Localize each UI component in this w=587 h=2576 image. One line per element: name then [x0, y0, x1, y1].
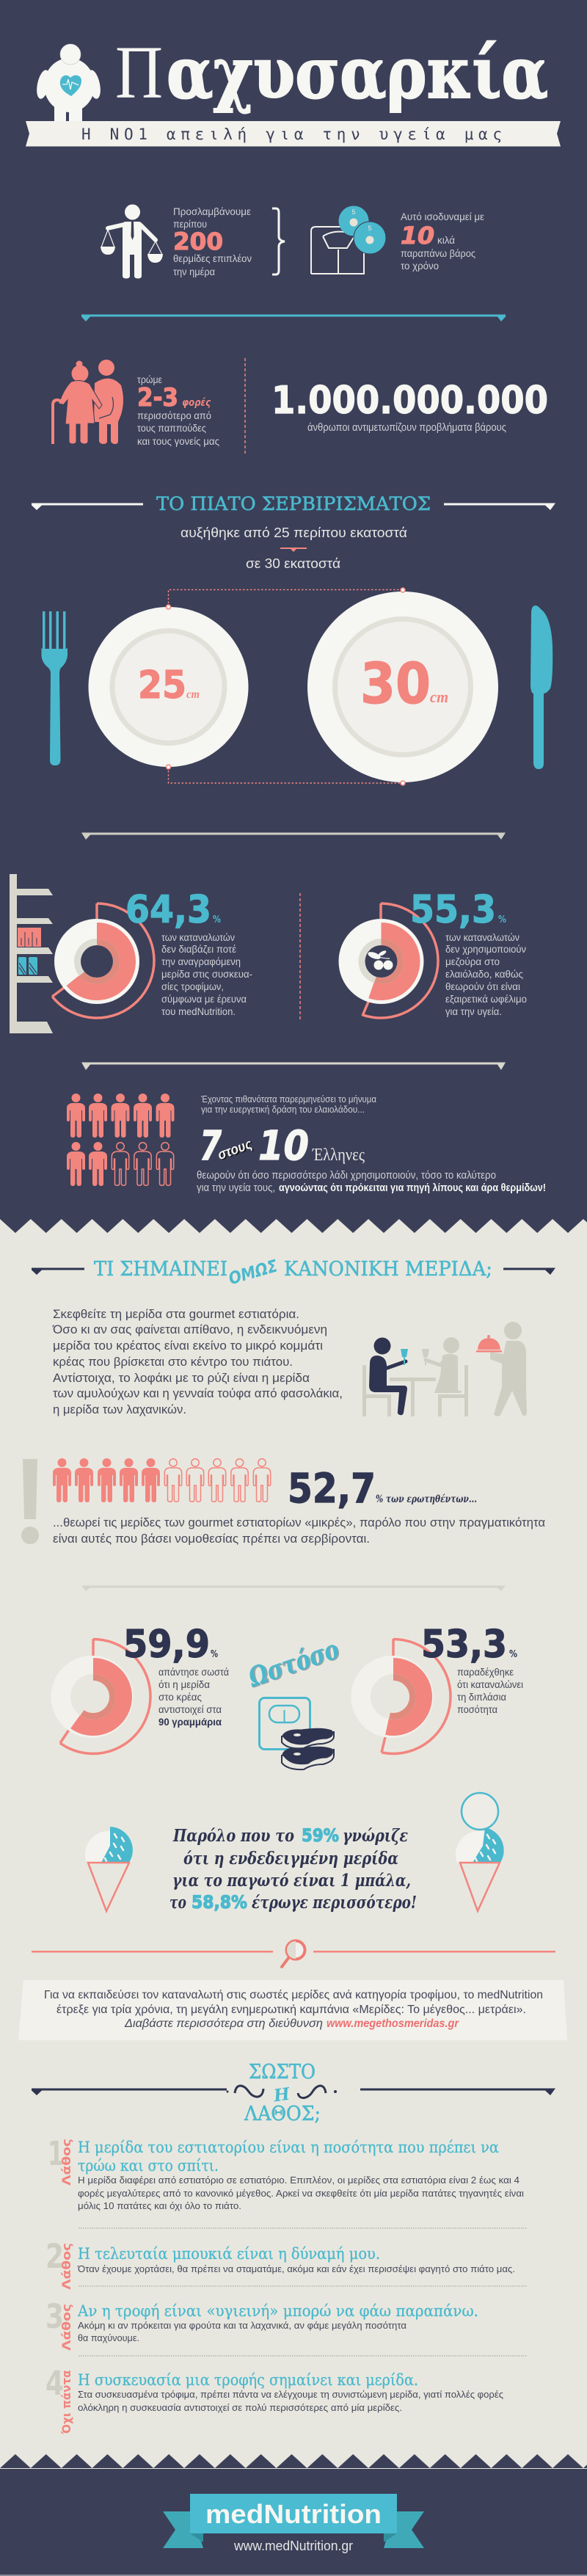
text block: ice cream statistic: για το παγωτό είναι 1 μπάλα,: [172, 1871, 411, 1891]
icon: shirt with weight discs: [311, 205, 386, 274]
statistic: 64,3 percent: %: [213, 914, 221, 925]
text: 7 in 10 Greeks: για την υγεία τους,: [197, 1182, 275, 1194]
myth 3: [45, 2297, 478, 2351]
statistic: 55,3 percent: εξαιρετικά ωφέλιμο: [445, 993, 527, 1005]
label: however: Ωστόσο: [244, 1634, 343, 1693]
text: 2-3 times: [137, 374, 219, 447]
myth 1: Η μερίδα του εστιατορίου είναι η ποσότητα που πρέπει να: [78, 2139, 499, 2156]
myth 2: [45, 2237, 515, 2290]
callout ribbon: campaign: έτρεξε για τρία χρόνια, τη μεγάλη ενημερωτική καμπάνια «Μερίδες: Το μέγεθος... μετράει».: [56, 2004, 526, 2016]
icon: fork: [41, 611, 68, 765]
statistic: 64,3 percent: του medNutrition.: [161, 1005, 236, 1017]
statistic: 55,3 percent: δεν χρησιμοποιούν: [445, 943, 526, 955]
icon: plate and double steak: [260, 1698, 334, 1769]
zigzag edge top: [0, 1219, 587, 1233]
statistic: 59,9 percent: 59,9: [123, 1623, 210, 1667]
plate: 25 cm: 25: [138, 663, 186, 707]
heading: right or wrong: ΣΩΣΤΟ: [249, 2061, 316, 2084]
text block: gourmet portion: Αντίστοιχα, το λοφάκι με το ρύζι είναι η μερίδα: [53, 1371, 310, 1385]
icon: ice cream one scoop: [85, 1827, 133, 1911]
icon: magnifier divider: [32, 1940, 555, 1967]
icon: restaurant scene: [362, 1322, 527, 1416]
callout ribbon: campaign: Για να εκπαιδεύσει τον καταναλωτή στις σωστές μερίδες ανά κατηγορία τροφίμου, το medNutrition: [44, 1989, 543, 2001]
chart: donut 55,3 percent with olive icon: [324, 903, 438, 1018]
statistic: 59,9 percent: %: [211, 1649, 218, 1660]
pictogram: 5 of 10 people: [53, 1458, 271, 1502]
divider: [81, 314, 506, 321]
statistic: one billion: 1.000.000.000: [271, 379, 548, 423]
plate size connectors: [166, 588, 405, 785]
divider: [81, 832, 506, 840]
text: 200 calories: 200: [173, 228, 223, 255]
statistic: 55,3 percent: %: [498, 914, 506, 925]
icon: man holding scales: [101, 204, 163, 279]
text: 2-3 times: τους παππούδες: [137, 422, 206, 434]
myth 1: μόλις 10 πατάτες και όχι όλο το πιάτο.: [78, 2200, 241, 2211]
myth 4: ολόκληρη η συσκευασία αντιστοιχεί σε πολύ περισσότερες από μία μερίδες.: [78, 2402, 402, 2413]
statistic: 53,3 percent: %: [509, 1649, 517, 1660]
text: 2-3 times: φορές: [182, 397, 211, 409]
icon: supermarket shelf: [10, 874, 53, 1033]
heading: right or wrong: ΛΑΘΟΣ;: [244, 2103, 321, 2125]
statistic: 52,7 percent: [288, 1465, 477, 1512]
myth 3: 3: [45, 2297, 64, 2336]
myth 1: τρώω και στο σπίτι.: [78, 2157, 219, 2175]
statistic: 64,3 percent: μερίδα στις συσκευα-: [161, 968, 252, 980]
text: 7 in 10 Greeks: Έλληνες: [312, 1146, 365, 1165]
footer logo ribbon: medNutrition: [205, 2499, 382, 2529]
background: cream panel: [0, 1219, 587, 2469]
text block: ice cream statistic: [169, 1825, 417, 1913]
text: 2-3 times: περισσότερο από: [137, 410, 211, 421]
text block: small portions: [53, 1516, 545, 1546]
icon: elderly couple: [53, 360, 123, 444]
text block: ice cream statistic: γνώριζε: [343, 1826, 408, 1846]
statistic: 53,3 percent: τη διπλάσια: [457, 1691, 506, 1703]
text: 200 calories: Προσλαμβάνουμε: [173, 205, 251, 217]
text block: gourmet portion: Όσο κι αν σας φαίνεται απίθανο, η ενδεικνυόμενη: [52, 1322, 327, 1336]
text: 7 in 10 Greeks: στους: [217, 1137, 256, 1164]
text: 2-3 times: και τους γονείς μας: [137, 435, 219, 447]
footer logo ribbon: [163, 2494, 424, 2548]
statistic: 55,3 percent: [410, 888, 527, 1017]
statistic: 59,9 percent: απάντησε σωστά: [158, 1666, 229, 1678]
subtitle ribbon: Η ΝΟ1 απειλή για την υγεία μας: [81, 125, 502, 143]
text: 7 in 10 Greeks: 10: [258, 1122, 309, 1169]
myth 2: Η τελευταία μπουκιά είναι η δύναμή μου.: [78, 2245, 380, 2263]
text: 10 kilos: Αυτό ισοδυναμεί με: [401, 211, 484, 222]
callout ribbon: campaign: Διαβάστε περισσότερα στη διεύθυνση: [124, 2017, 323, 2030]
text block: ice cream statistic: έτρωγε περισσότερο!: [252, 1893, 417, 1913]
pictogram: 7 of 10 people: [67, 1094, 175, 1186]
statistic: 64,3 percent: [125, 888, 252, 1017]
zigzag edge bottom: [0, 2454, 587, 2468]
myth 4: Η συσκευασία μια τροφής σημαίνει και μερίδα.: [78, 2371, 418, 2389]
text: 2-3 times: 2-3: [137, 383, 178, 412]
callout ribbon: campaign: www.megethosmeridas.gr: [327, 2017, 459, 2030]
text block: small portions: ...θεωρεί τις μερίδες των gourmet εστιατορίων «μικρές», παρόλο που στην πραγματικότητα: [53, 1516, 545, 1529]
text: 7 in 10 Greeks: στους: [216, 1136, 255, 1163]
statistic: 52,7 percent: % των ερωτηθέντων...: [376, 1493, 477, 1505]
text: 200 calories: θερμίδες επιπλέον: [173, 252, 252, 264]
myth 3: Λάθος: [59, 2304, 73, 2351]
statistic: 52,7 percent: 52,7: [288, 1465, 376, 1512]
heading: serving plate: [32, 493, 555, 514]
text block: ice cream statistic: 59%: [302, 1825, 339, 1846]
text: 200 calories: [173, 205, 252, 277]
myth 1: Η μερίδα διαφέρει από εστιατόριο σε εστιατόριο. Επιπλέον, οι μερίδες στα εστιατόρια είναι 2 έως και 4: [78, 2175, 519, 2186]
heading: what is a normal portion: ΤΙ ΣΗΜΑΙΝΕΙ: [94, 1258, 227, 1281]
text: 10 kilos: το χρόνο: [401, 260, 439, 272]
statistic: 64,3 percent: των καταναλωτών: [161, 931, 235, 943]
myth 4: 4: [45, 2364, 64, 2403]
text: 7 in 10 Greeks: αγνοώντας ότι πρόκειται για πηγή λίπους και άρα θερμίδων!: [279, 1182, 546, 1194]
statistic: 55,3 percent: για την υγεία.: [445, 1005, 502, 1017]
plate: 25 cm: [88, 607, 248, 767]
plate: 30 cm: cm: [430, 688, 448, 706]
statistic: 59,9 percent: στο κρέας: [158, 1691, 202, 1703]
chart: donut 53,3 percent: [336, 1639, 451, 1754]
myth 3: Ακόμη κι αν πρόκειται για φρούτα και τα λαχανικά, αν φάμε μεγάλη ποσότητα: [78, 2320, 406, 2331]
text: plate growth: αυξήθηκε από 25 περίπου εκατοστά: [181, 525, 407, 540]
text: plate growth: [181, 525, 407, 571]
text: 200 calories: την ημέρα: [173, 266, 215, 277]
subtitle ribbon: [26, 121, 561, 147]
heading: right or wrong: [32, 2061, 555, 2125]
statistic: 55,3 percent: μεζούρα στο: [445, 956, 500, 967]
text block: ice cream statistic: 58,8%: [192, 1892, 247, 1913]
callout ribbon: campaign: [18, 1980, 567, 2040]
icon: ice cream two scoops: [456, 1793, 504, 1911]
statistic: 53,3 percent: παραδέχθηκε: [457, 1666, 514, 1678]
footer url: www.medNutrition.gr: [233, 2539, 353, 2553]
text: 7 in 10 Greeks: [197, 1094, 546, 1194]
myth 1: φορές μεγαλύτερες από το κανονικό μέγεθος. Αρκεί να σκεφθείτε ότι μία μερίδα πατάτες τηγανητές είναι: [78, 2188, 524, 2199]
text: 7 in 10 Greeks: Έχοντας πιθανότατα παρερμηνεύσει το μήνυμα: [200, 1094, 376, 1105]
text: 2-3 times: τρώμε: [137, 374, 162, 385]
statistic: 59,9 percent: [123, 1623, 229, 1728]
plate: 25 cm: cm: [186, 688, 200, 701]
text: 10 kilos: [401, 211, 484, 272]
statistic: one billion: άνθρωποι αντιμετωπίζουν προβλήματα βάρους: [307, 421, 506, 434]
text block: gourmet portion: των αμυλούχων και η γενναία τούφα από φασολάκια,: [53, 1386, 343, 1400]
text block: gourmet portion: μερίδα του κρέατος είναι εκείνο το μικρό κομμάτι: [53, 1339, 323, 1353]
myth 3: Αν η τροφή είναι «υγιεινή» μπορώ να φάω παραπάνω.: [77, 2302, 478, 2320]
icon: overweight person with heart: [34, 44, 103, 123]
text block: ice cream statistic: το: [169, 1893, 186, 1913]
chart: donut 64,3 percent: [40, 903, 154, 1018]
text: 10 kilos: κιλά: [437, 234, 455, 246]
heading: right or wrong: Η: [271, 2084, 292, 2106]
statistic: 64,3 percent: την αναγραφόμενη: [161, 956, 241, 967]
myth 2: 2: [45, 2237, 64, 2276]
text block: small portions: είναι αυτές που βάσει νομοθεσίας πρέπει να σερβίρονται.: [53, 1532, 370, 1546]
text: 200 calories: περίπου: [173, 218, 207, 230]
statistic: 55,3 percent: ελαιόλαδο, καθώς: [445, 968, 523, 980]
heading: what is a normal portion: [32, 1256, 555, 1289]
title: Π: [115, 31, 163, 114]
text: 7 in 10 Greeks: για την ευεργετική δράση του ελαιολάδου...: [201, 1104, 365, 1115]
statistic: 64,3 percent: 64,3: [125, 888, 211, 932]
statistic: 55,3 percent: θεωρούν ότι είναι: [445, 980, 520, 992]
heading: what is a normal portion: ΚΑΝΟΝΙΚΗ ΜΕΡΙΔΑ;: [284, 1258, 492, 1281]
statistic: 59,9 percent: αντιστοιχεί στα: [158, 1703, 222, 1715]
divider: [81, 1063, 506, 1070]
chart: donut 59,9 percent: [36, 1639, 150, 1754]
statistic: 59,9 percent: ότι η μερίδα: [158, 1678, 210, 1690]
statistic: 59,9 percent: 90 γραμμάρια: [158, 1716, 222, 1728]
icon: exclamation mark: [21, 1459, 39, 1544]
myth 2: Λάθος: [59, 2243, 73, 2290]
myth 4: Στα συσκευασμένα τρόφιμα, πρέπει πάντα να ελέγχουμε τη συνιστώμενη μερίδα, γιατί πολλές φορές: [78, 2389, 503, 2400]
statistic: 55,3 percent: 55,3: [410, 888, 496, 932]
myth 2: Όταν έχουμε χορτάσει, θα πρέπει να σταματάμε, ακόμα και εάν έχει περισσέψει φαγητό στο πιάτο μας.: [77, 2263, 515, 2274]
myth 4: [45, 2364, 503, 2434]
text: plate growth: σε 30 εκατοστά: [246, 556, 340, 571]
myth 1: [48, 2134, 524, 2211]
statistic: 53,3 percent: ότι καταναλώνει: [457, 1678, 523, 1690]
myth 1: 1: [48, 2134, 64, 2173]
plate: 30 cm: [307, 592, 498, 782]
label: however: Ωστόσο: [245, 1634, 344, 1694]
statistic: 53,3 percent: [421, 1623, 523, 1715]
heading: serving plate: ΤΟ ΠΙΑΤΟ ΣΕΡΒΙΡΙΣΜΑΤΟΣ: [156, 493, 431, 514]
text block: gourmet portion: Σκεφθείτε τη μερίδα στα gourmet εστιατόρια.: [53, 1307, 299, 1321]
statistic: 55,3 percent: των καταναλωτών: [445, 931, 519, 943]
myth 1: Λάθος: [59, 2139, 73, 2186]
text: 7 in 10 Greeks: θεωρούν ότι όσο περισσότερο λάδι χρησιμοποιούν, τόσο το καλύτερο: [197, 1169, 496, 1182]
myth 3: θα παχύνουμε.: [78, 2332, 139, 2343]
text block: gourmet portion: κρέας που βρίσκεται στο κέντρο του πιάτου.: [53, 1355, 293, 1369]
text block: gourmet portion: η μερίδα των λαχανικών.: [53, 1402, 186, 1416]
text: 10 kilos: παραπάνω βάρος: [401, 247, 475, 259]
text: 7 in 10 Greeks: 7: [200, 1122, 222, 1169]
icon: shirt with weight discs: 5: [368, 225, 372, 232]
statistic: 53,3 percent: ποσότητα: [457, 1703, 497, 1715]
statistic: 64,3 percent: σύμφωνα με έρευνα: [161, 993, 247, 1005]
heading: what is a normal portion: ΟΜΩΣ: [227, 1256, 280, 1289]
icon: brace: [272, 208, 285, 274]
myth 4: Όχι πάντα: [59, 2370, 73, 2434]
icon: shirt with weight discs: 5: [351, 208, 356, 216]
statistic: 53,3 percent: 53,3: [421, 1623, 507, 1667]
statistic: 64,3 percent: σίες τροφίμων,: [161, 980, 224, 992]
text block: ice cream statistic: ότι η ενδεδειγμένη μερίδα: [183, 1849, 398, 1869]
icon: knife: [531, 605, 553, 769]
plate: 30 cm: 30: [360, 652, 431, 717]
text: 10 kilos: 10: [401, 222, 434, 250]
text block: ice cream statistic: Παρόλο που το: [172, 1826, 294, 1846]
statistic: 64,3 percent: δεν διαβάζει ποτέ: [161, 943, 236, 955]
text block: gourmet portion: [52, 1307, 343, 1416]
divider: [81, 1585, 506, 1591]
